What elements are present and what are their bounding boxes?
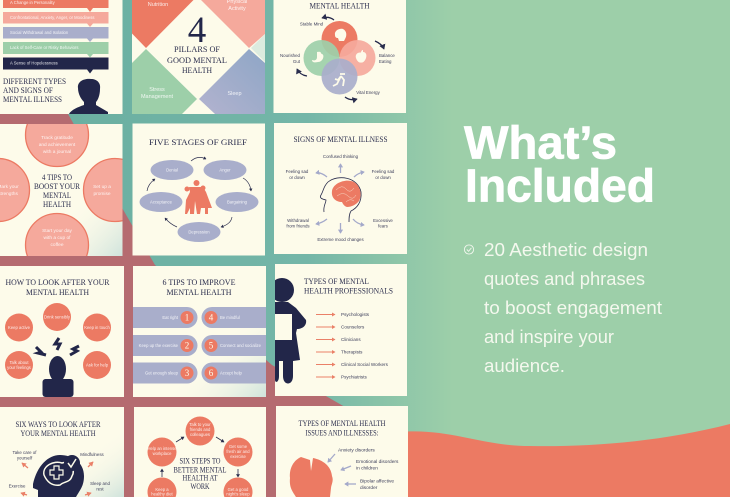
labels: [286, 154, 395, 242]
diamond labels: Nutrition: [148, 2, 168, 8]
labels: in children: [356, 466, 378, 472]
card: five stages of grief: [132, 124, 265, 256]
stage labels: Acceptance: [150, 200, 173, 204]
list bars: A Change in Personality: [10, 0, 56, 5]
arrows: [328, 454, 356, 484]
list labels: Therapists: [341, 350, 363, 354]
tip labels: Get enough sleep: [145, 370, 179, 376]
numbers: 1: [185, 312, 189, 322]
list labels: Clinical Social Workers: [341, 362, 389, 367]
icon: person silhouette: [69, 79, 108, 114]
step labels: Keep a: [155, 487, 169, 492]
labels: Excessive: [373, 218, 393, 223]
labels: Sleep and: [90, 481, 110, 486]
labels: or down: [375, 175, 391, 180]
tip labels: [139, 315, 262, 376]
heading: what's included: What’s: [464, 116, 617, 168]
diamond: nutrition: [132, 0, 194, 48]
labels: Eating: [379, 59, 392, 64]
heading: ISSUES AND ILLNESSES:: [306, 428, 378, 438]
heading: [34, 174, 80, 207]
venn circles: [304, 21, 376, 94]
numbers: 2: [185, 340, 189, 350]
heading: [167, 46, 226, 73]
card: types of mental health professionals: [270, 264, 407, 396]
labels: Withdrawal: [287, 218, 309, 223]
diamond labels: Activity: [228, 6, 246, 12]
heading: YOUR MENTAL HEALTH: [20, 429, 96, 438]
stage labels: Denial: [166, 168, 178, 172]
heading: DIFFERENT TYPES: [3, 77, 66, 86]
heading: [16, 422, 100, 436]
heading: [174, 458, 226, 489]
card: 4 pillars of good mental health: [132, 0, 265, 114]
labels: Nourished: [280, 53, 301, 58]
labels: Confused thinking: [323, 154, 359, 159]
heading: BOOST YOUR: [34, 182, 81, 191]
diamond labels: Management: [141, 94, 174, 100]
tip labels: [7, 314, 110, 370]
step labels: fresh air and: [226, 449, 250, 454]
list labels: Clinicians: [341, 337, 361, 342]
labels: Feeling sad: [372, 169, 395, 174]
list labels: Counselors: [341, 324, 365, 330]
card: how to look after your mental health: [0, 266, 124, 397]
heading: [298, 419, 386, 438]
heading: MENTAL HEALTH: [166, 288, 232, 297]
body text: quotes and phrases: [484, 269, 645, 289]
heading: MENTAL: [43, 191, 71, 200]
card: mental health venn: [274, 0, 406, 113]
card: 6 tips to improve mental health: [133, 266, 266, 397]
labels: [9, 450, 110, 492]
labels: Anxiety disorders: [338, 448, 375, 454]
labels: Vital Energy: [356, 90, 381, 95]
numbers: [185, 312, 214, 378]
step labels: Get some: [229, 444, 248, 449]
heading: [162, 278, 236, 297]
heading: SIX WAYS TO LOOK AFTER: [16, 420, 101, 429]
tip labels: with a cup of: [44, 235, 71, 241]
tip labels: Track gratitude: [41, 135, 73, 141]
labels: disorder: [360, 485, 378, 491]
icon: apple: [356, 50, 366, 63]
card: 4 tips to boost your mental health: [0, 124, 122, 256]
labels: Stable Mind: [300, 22, 324, 26]
list labels: [341, 312, 389, 380]
diamond labels: Stress: [149, 87, 165, 93]
labels: Bipolar affective: [360, 478, 394, 484]
heading: SIX STEPS TO: [180, 456, 221, 466]
icon: stomach: [312, 52, 323, 62]
card: types of mental health issues and illnesses: [276, 406, 408, 497]
icon: head with cross and check: [33, 455, 84, 497]
labels: or down: [289, 175, 305, 180]
stage labels: Bargaining: [227, 200, 248, 204]
tip labels: Keep in touch: [84, 325, 110, 330]
heading: [6, 280, 110, 295]
tip labels: coffee: [51, 242, 64, 248]
icon: brain: [332, 181, 361, 207]
heading: MENTAL HEALTH: [26, 288, 89, 297]
labels: from friends: [286, 224, 310, 228]
heading: TYPES OF MENTAL HEALTH: [298, 419, 386, 428]
heading: HEALTH: [43, 200, 71, 209]
arrows: [297, 17, 384, 100]
arrows: [316, 164, 364, 233]
list labels: Psychiatrists: [341, 374, 367, 380]
heading: HEALTH: [182, 66, 212, 75]
tip labels: Start your day: [42, 228, 73, 234]
icon: check badge: [464, 245, 474, 254]
step labels: exercise: [230, 454, 246, 459]
icon: head outline: [320, 178, 361, 222]
labels: yourself: [17, 456, 33, 460]
step labels: colleagues: [190, 432, 210, 437]
clipboard: [275, 314, 292, 340]
rose diagonal background shape: [0, 114, 420, 497]
tip bars: [133, 307, 266, 384]
step labels: Talk to your: [189, 422, 211, 427]
list labels: Psychologists: [341, 312, 370, 317]
number 4: 4: [188, 10, 206, 51]
diamond labels: [141, 0, 247, 100]
heading: SIGNS OF MENTAL ILLNESS: [294, 135, 388, 144]
heading: 6 TIPS TO IMPROVE: [162, 278, 236, 287]
tip labels: and achievement: [39, 142, 76, 148]
tip circles: [5, 303, 111, 379]
icon: head: [335, 29, 346, 41]
labels: Extreme mood changes: [317, 237, 364, 242]
tip labels: [0, 135, 111, 248]
body text: 20 Aesthetic design: [484, 240, 648, 260]
icon: lightning bolts: [36, 338, 79, 355]
labels: Take care of: [13, 450, 37, 455]
icon: person: [42, 356, 74, 397]
labels: Mindfulness: [80, 452, 105, 457]
step labels: [147, 422, 250, 496]
heading: WORK: [190, 482, 210, 491]
arrows: [21, 462, 93, 495]
step labels: workplace: [153, 451, 172, 456]
body text: [484, 240, 662, 376]
labels: rest: [96, 486, 104, 492]
diamond labels: Sleep: [227, 91, 242, 97]
heading: GOOD MENTAL: [167, 56, 227, 65]
diamond: stress management: [132, 49, 197, 114]
arrows: [316, 314, 335, 377]
tip labels: Drink sensibly: [44, 314, 71, 320]
stage labels: Anger: [219, 168, 231, 172]
labels: Balance: [379, 53, 395, 58]
heading: HEALTH AT: [182, 474, 218, 482]
heading: FIVE STAGES OF GRIEF: [149, 137, 247, 147]
heading: BETTER MENTAL: [174, 466, 227, 474]
icon: professional figure: [275, 278, 306, 384]
list bars: [3, 0, 108, 74]
heading: [304, 278, 392, 294]
step circles: [148, 416, 252, 497]
tip labels: Eat right: [162, 315, 179, 320]
step labels: Help an intense: [147, 446, 177, 451]
numbers: 6: [209, 368, 214, 378]
icon: family: [184, 180, 212, 214]
labels: Feeling sad: [286, 169, 309, 174]
stage labels: Depression: [188, 230, 210, 234]
body text: to boost engagement: [484, 298, 662, 318]
list bars: Lack of Self-Care or Risky Behaviors: [10, 45, 78, 50]
tip labels: with a journal: [43, 149, 71, 155]
tip labels: Keep active: [8, 325, 31, 330]
tip labels: Be mindful: [220, 315, 240, 320]
heading: 4 TIPS TO: [42, 173, 72, 182]
card: six steps to better mental health at work: [134, 407, 266, 497]
tip labels: Talk about: [9, 360, 29, 365]
card: six ways to look after your mental health: [0, 407, 124, 497]
labels: Emotional disorders: [356, 459, 399, 465]
heading: what's included: [464, 116, 655, 212]
labels: [338, 448, 399, 491]
numbers: 4: [209, 312, 214, 322]
heading: HOW TO LOOK AFTER YOUR: [6, 278, 110, 287]
heading: HEALTH PROFESSIONALS: [304, 286, 393, 296]
labels: Gut: [293, 59, 301, 64]
tip labels: promise: [93, 191, 111, 197]
step labels: night's sleep: [226, 492, 250, 496]
heading: MENTAL HEALTH: [310, 2, 370, 10]
heading: [3, 78, 66, 102]
tip labels: Keep up the exercise: [139, 343, 179, 348]
step labels: friends and: [190, 427, 211, 432]
cycle arrows: [147, 157, 251, 227]
arrows: [162, 437, 238, 477]
list bars: A Sense of Hopelessness: [10, 60, 58, 66]
numbers: 5: [209, 340, 214, 350]
labels: Exercise: [9, 484, 26, 488]
icon: cracked head: [290, 457, 333, 497]
tip labels: Set up a: [93, 184, 111, 190]
body text: audience.: [484, 356, 565, 376]
corner fade: [251, 34, 265, 62]
numbers: 3: [185, 368, 190, 378]
heading: TYPES OF MENTAL: [304, 277, 369, 286]
heading: AND SIGNS OF: [3, 86, 53, 95]
icon: runner: [333, 74, 345, 86]
tip labels: Ask for help: [86, 362, 109, 368]
number circles: [180, 311, 218, 380]
tip labels: Accept help: [220, 370, 243, 376]
stage labels: [150, 168, 248, 234]
list bars: Social Withdrawal and Isolation: [10, 30, 69, 35]
list bars: Confrontational, Anxiety, Anger, or Moodiness: [10, 15, 94, 20]
stage ellipses: [140, 160, 258, 242]
labels: [280, 22, 395, 95]
step labels: healthy diet: [151, 492, 174, 496]
heading: MENTAL ILLNESS: [3, 95, 62, 104]
tip circles: [0, 124, 122, 256]
tip labels: Connect and socialize: [220, 343, 262, 348]
body text: and inspire your: [484, 327, 614, 347]
labels: fears: [378, 224, 389, 228]
diamond: physical activity: [201, 0, 265, 48]
tip labels: your feelings: [7, 365, 31, 370]
diamond: sleep: [199, 49, 265, 114]
card: different types and signs of mental illness: [0, 0, 122, 114]
heading: PILLARS OF: [174, 45, 221, 54]
step labels: Get a good: [228, 487, 249, 492]
coral wave: [400, 424, 730, 497]
card: signs of mental illness: [274, 123, 407, 254]
heading: what's included: Included: [465, 160, 655, 212]
